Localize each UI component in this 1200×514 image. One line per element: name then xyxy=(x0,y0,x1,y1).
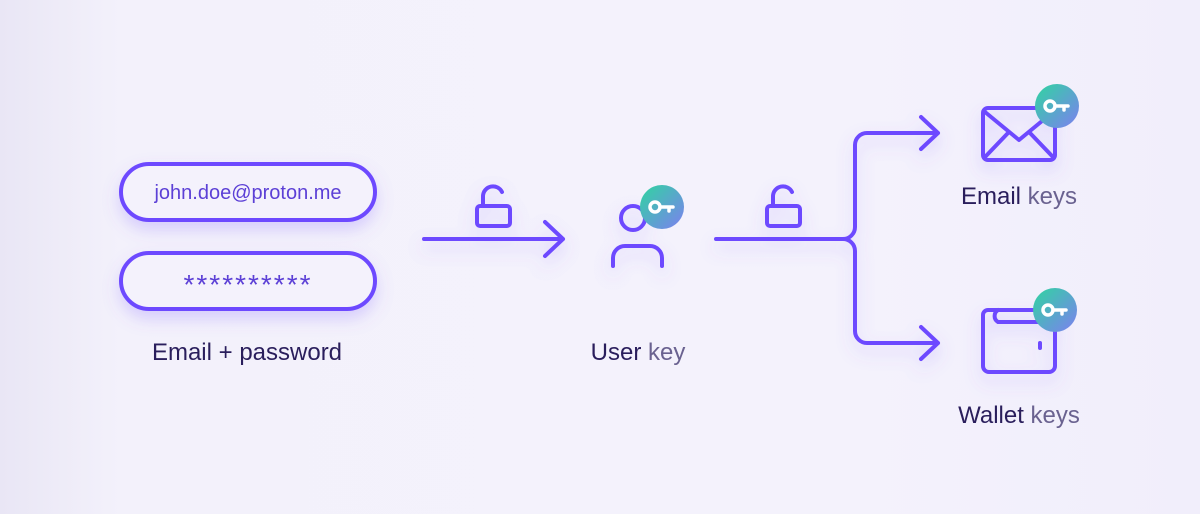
icon: envelope xyxy=(983,108,1055,160)
badge: email key xyxy=(1035,84,1079,128)
panel: password field: ********** xyxy=(184,269,312,300)
panel: password field xyxy=(121,253,375,309)
panel: email field: john.doe@proton.me xyxy=(153,182,342,204)
icon: wallet xyxy=(983,310,1055,372)
line: user to branch xyxy=(716,117,938,359)
badge: user key xyxy=(640,185,684,229)
label: user key: User key xyxy=(591,339,685,366)
icon: user xyxy=(613,206,662,266)
label: email keys: Email keys xyxy=(961,183,1077,210)
label: email + password: Email + password xyxy=(152,339,342,366)
panel: email field xyxy=(121,164,375,220)
icon: unlocked lock 1 xyxy=(477,186,510,226)
icon: unlocked lock 2 xyxy=(767,186,800,226)
badge: wallet key xyxy=(1033,288,1077,332)
label: wallet keys: Wallet keys xyxy=(958,402,1080,429)
arrow: to user key xyxy=(424,222,563,256)
